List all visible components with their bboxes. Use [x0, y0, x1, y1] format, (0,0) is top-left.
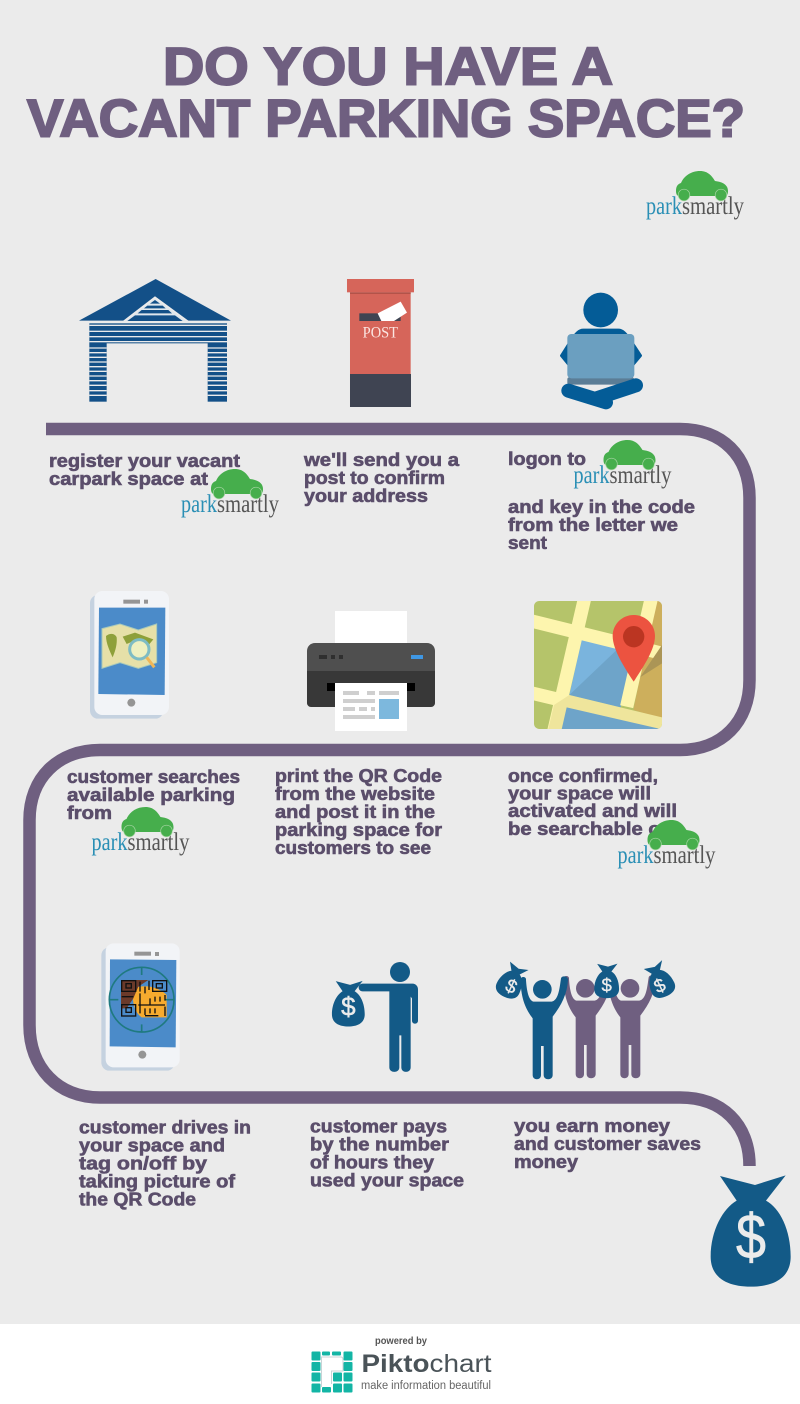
logo: parksmartly step 1: park: [181, 491, 217, 518]
text: logon: sent: [508, 533, 547, 553]
logo: parksmartly header: smartly: [682, 193, 744, 220]
icon: three people holding money bags: [493, 960, 678, 1079]
text: customer drives in: tag on/off by: [79, 1154, 207, 1174]
text: you earn money: [514, 1116, 701, 1172]
title: VACANT PARKING SPACE?: [27, 90, 745, 148]
text: customer pays: by the number: [310, 1134, 449, 1154]
icon: three people holding money bags: $: [502, 974, 521, 998]
text: logon: and key in the code: [508, 497, 695, 517]
text: print QR code: and post it in the: [275, 802, 435, 822]
icon: phone with map: [90, 591, 169, 719]
text: once confirmed: your space will: [508, 784, 651, 804]
text: print QR code: print the QR Code: [275, 766, 442, 786]
text: customer drives in: your space and: [79, 1136, 225, 1156]
logo: parksmartly step 6: [618, 820, 716, 869]
logo: parksmartly step 4: [92, 807, 190, 856]
icon: person with laptop: [561, 293, 641, 402]
text: customer searches: from: [67, 803, 112, 823]
logo: parksmartly step 6: park: [618, 842, 654, 869]
text: register: carpark space at: [49, 469, 208, 489]
footer label: powered by: [375, 1336, 427, 1347]
text: customer pays: [310, 1116, 464, 1190]
text: logon: logon to: [508, 449, 586, 469]
text: print QR code: from the website: [275, 784, 435, 804]
icon: large money bag: [711, 1175, 791, 1287]
text: print QR code: [275, 766, 442, 858]
text: once confirmed: activated and will: [508, 801, 677, 821]
icon: post box: [347, 279, 414, 407]
logo: parksmartly step 1: smartly: [217, 491, 279, 518]
icon: man holding money bag: $: [341, 991, 356, 1021]
text: post confirmation: [303, 450, 460, 506]
text: post confirmation: your address: [304, 486, 428, 506]
title: DO YOU HAVE A: [163, 38, 613, 96]
text: you earn money: money: [514, 1152, 578, 1172]
text: post confirmation: post to confirm: [304, 468, 445, 488]
icon: phone scanning QR code: [101, 943, 180, 1071]
icon: map with pin: [530, 597, 662, 733]
icon: three people holding money bags: $: [601, 974, 612, 995]
text: post confirmation: we'll send you a: [303, 450, 460, 470]
icon: garage: [79, 279, 231, 402]
tagline: make information beautiful: [361, 1380, 491, 1392]
icon: post box: POST: [363, 324, 398, 341]
icon: large money bag: $: [736, 1203, 766, 1273]
text: customer searches: customer searches: [67, 767, 240, 787]
icon: three people holding money bags: $: [650, 973, 669, 997]
winding path connector: [30, 429, 750, 1166]
wordmark: Piktochart: [362, 1350, 492, 1378]
text: print QR code: parking space for: [275, 820, 442, 840]
text: customer pays: of hours they: [310, 1152, 434, 1172]
logo: parksmartly step 1: [181, 469, 279, 518]
text: register: [49, 451, 240, 489]
logo: parksmartly step 6: smartly: [654, 842, 716, 869]
icon: man holding money bag: [332, 962, 418, 1072]
text: customer drives in: customer drives in: [79, 1118, 251, 1138]
text: customer searches: [67, 767, 240, 823]
footer: Piktochart: [0, 1324, 800, 1404]
text: customer pays: used your space: [310, 1170, 464, 1190]
text: once confirmed: [508, 766, 677, 839]
logo: parksmartly step 4: park: [92, 829, 128, 856]
logo: parksmartly step 3: park: [574, 462, 610, 489]
logo: parksmartly step 3: smartly: [610, 462, 672, 489]
logo: parksmartly step 3: [574, 440, 672, 489]
text: you earn money: you earn money: [514, 1116, 670, 1136]
logo: parksmartly header: park: [646, 193, 682, 220]
logo: parksmartly step 4: smartly: [128, 829, 190, 856]
title: [27, 38, 745, 148]
text: customer searches: available parking: [67, 785, 235, 805]
text: once confirmed: be searchable on: [508, 819, 673, 839]
wordmark: Piktochart: chart: [430, 1350, 492, 1378]
text: print QR code: customers to see: [275, 838, 431, 858]
text: once confirmed: once confirmed,: [508, 766, 658, 786]
text: logon: [508, 449, 695, 553]
wordmark: Piktochart: Pikto: [362, 1350, 430, 1378]
text: register: register your vacant: [49, 451, 240, 471]
logo mark: Piktochart: [312, 1352, 352, 1392]
text: customer drives in: the QR Code: [79, 1190, 196, 1210]
text: you earn money: and customer saves: [514, 1134, 701, 1154]
text: customer drives in: [79, 1118, 251, 1210]
logo: parksmartly header: [646, 171, 744, 220]
text: logon: from the letter we: [508, 515, 678, 535]
text: customer pays: customer pays: [310, 1116, 447, 1136]
icon: printer: [307, 611, 435, 731]
text: customer drives in: taking picture of: [79, 1172, 236, 1192]
